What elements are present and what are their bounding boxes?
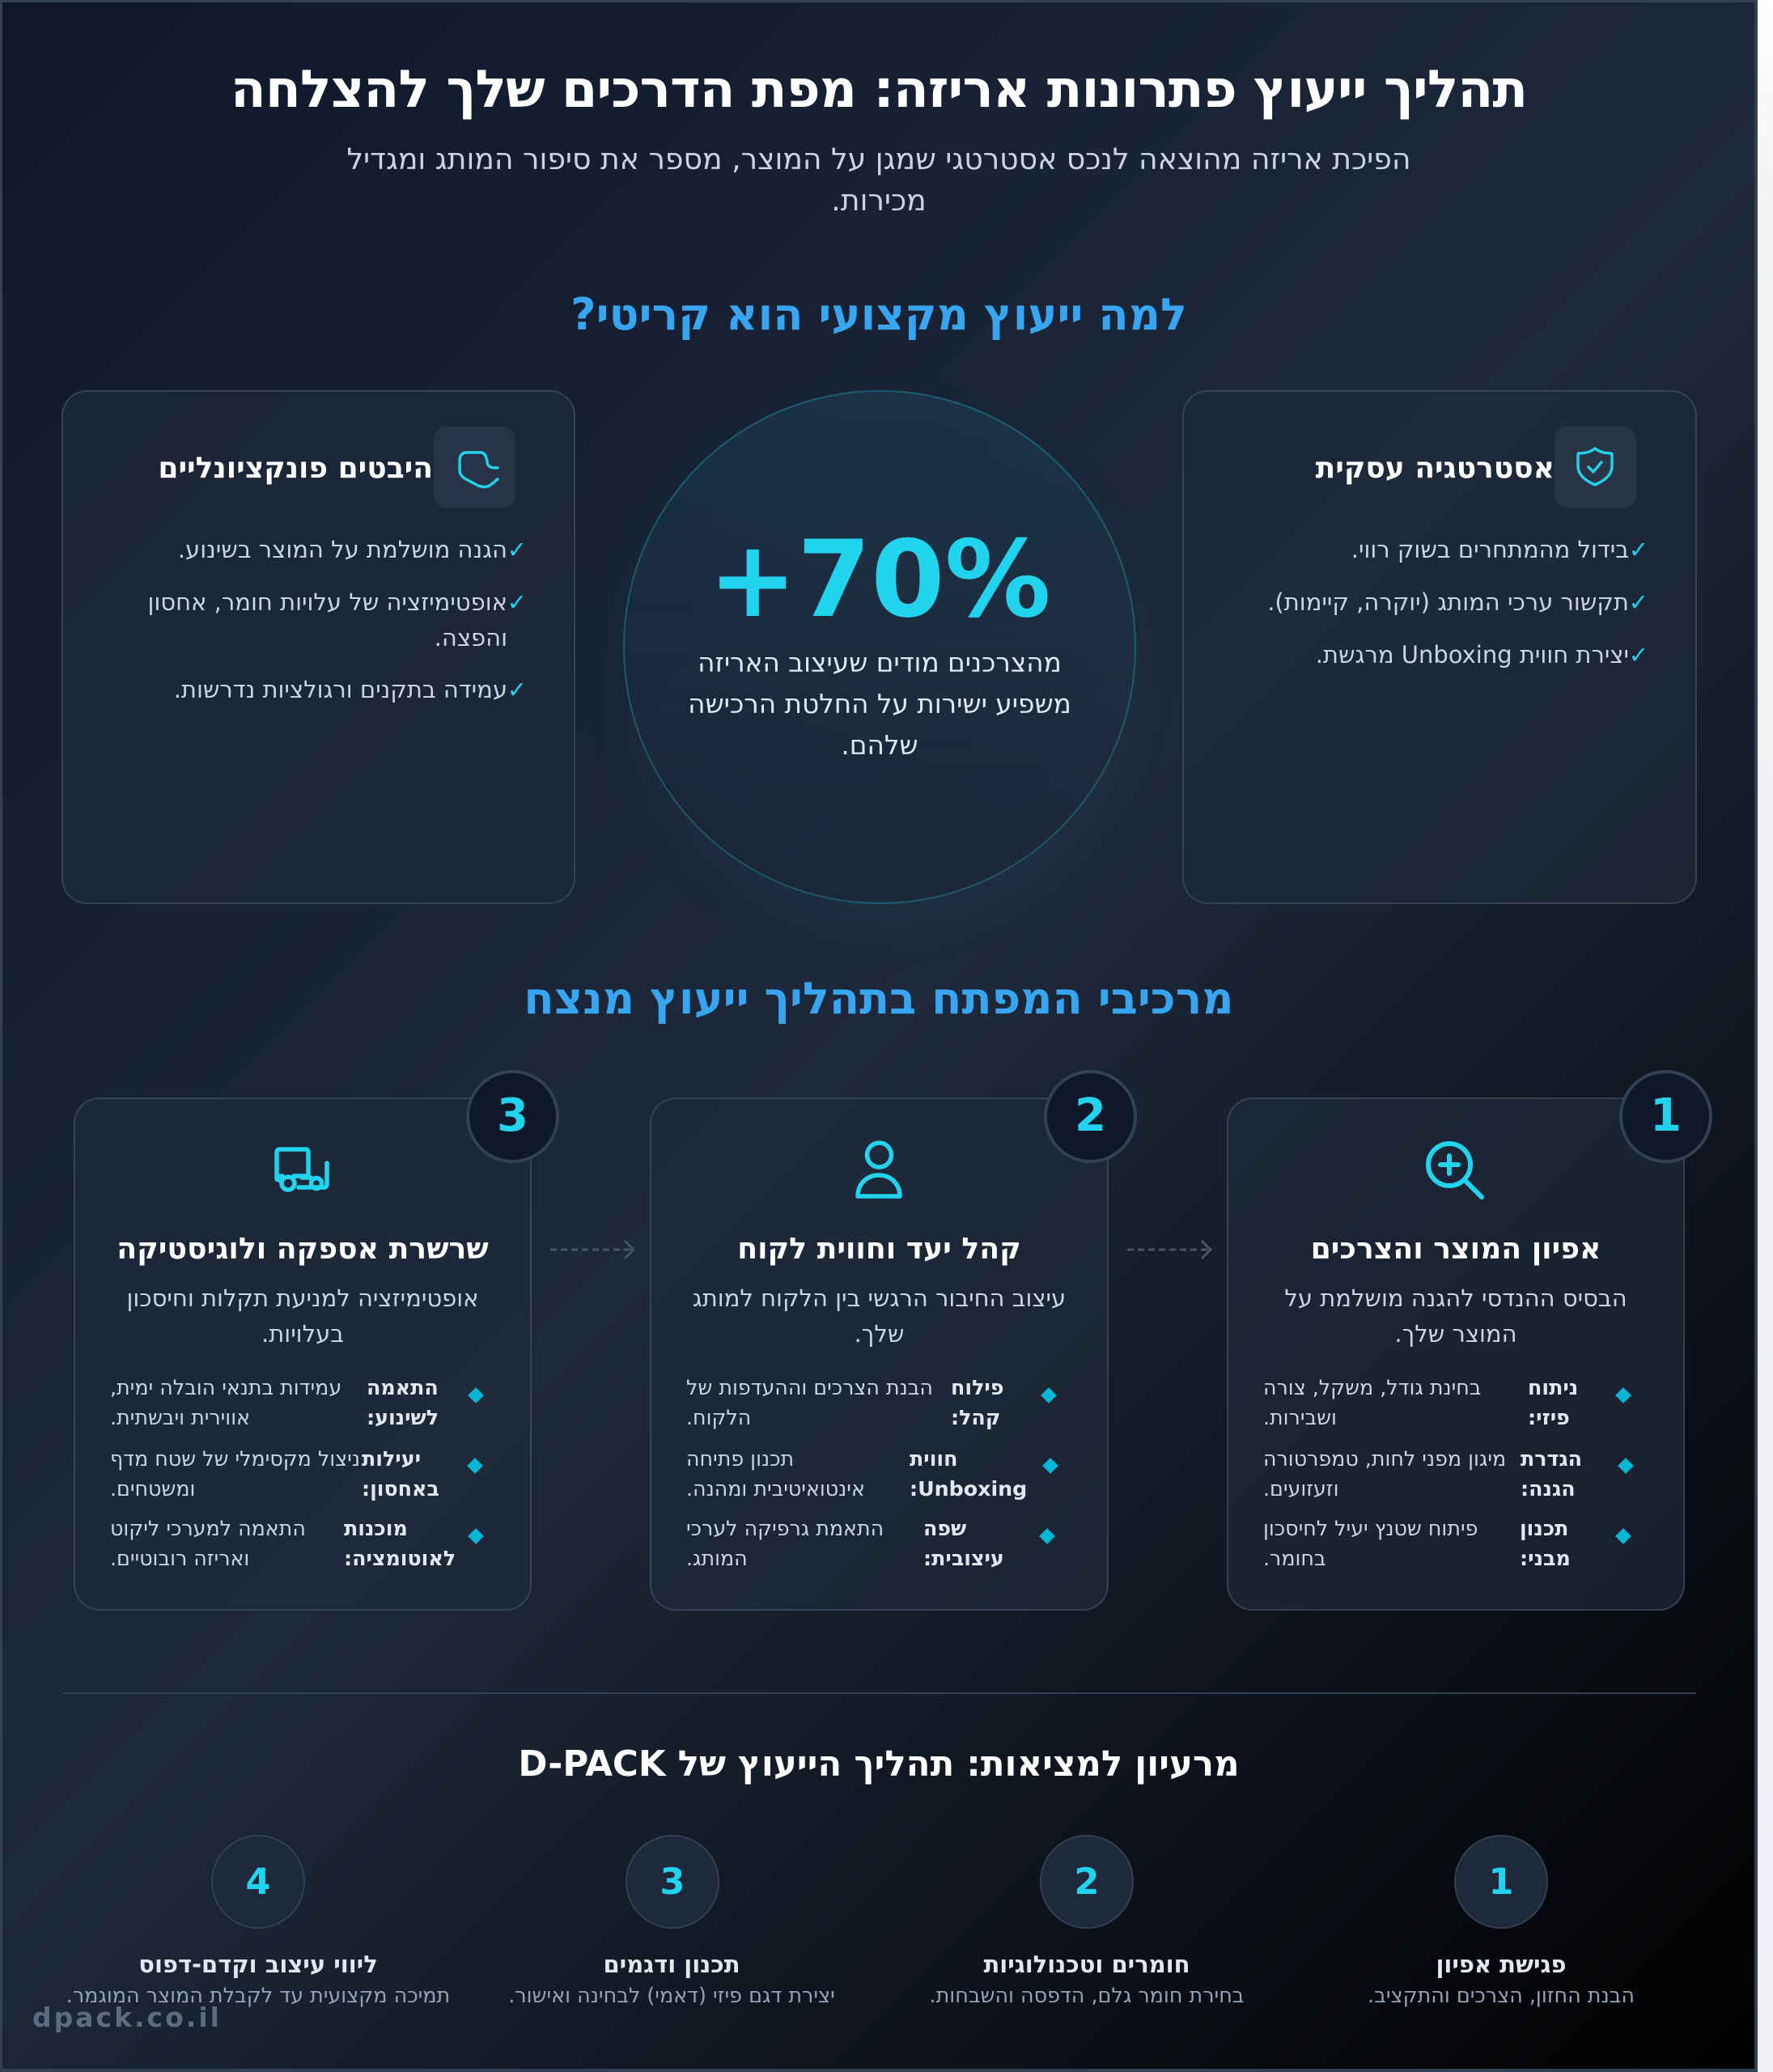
item: structural design: מבני: xyxy=(1520,1547,1571,1570)
component title: אפיון המוצר והצרכים xyxy=(1311,1231,1601,1266)
component title: אופטימיזציה למניעת תקלות וחיסכון xyxy=(126,1284,479,1312)
item: audience segmentation: קהל: xyxy=(951,1406,1000,1429)
item: protection definition: הגדרת xyxy=(1521,1447,1582,1471)
item: storage efficiency: ומשטחים. xyxy=(110,1477,195,1501)
item: design language: שפה xyxy=(923,1517,966,1540)
item: design language xyxy=(686,1517,1055,1570)
item: protection definition: מיגון מפני לחות, טמפרטורה xyxy=(1263,1447,1506,1471)
checklist: ✓ xyxy=(507,536,527,563)
big number: +70% xyxy=(708,517,1051,641)
item: shipping fit: התאמה xyxy=(367,1376,439,1399)
item: automation readiness: התאמה למערכי ליקוט xyxy=(110,1517,306,1540)
item: storage efficiency xyxy=(110,1447,483,1501)
checklist: ✓ xyxy=(507,676,527,703)
step text 2 xyxy=(828,1942,1346,2015)
badge 2: 2 xyxy=(1075,1089,1106,1142)
panel: functional aspects xyxy=(62,390,575,904)
subtitle: מכירות. xyxy=(831,183,927,218)
step circle 2: 2 xyxy=(1074,1860,1100,1903)
item: audience segmentation: פילוח xyxy=(951,1376,1003,1399)
item: protection definition: וזעזועים. xyxy=(1263,1477,1338,1501)
checklist: עמידה בתקנים ורגולציות נדרשות. xyxy=(174,676,507,703)
component title: המוצר שלך. xyxy=(1394,1320,1517,1348)
step circle 1: 1 xyxy=(1488,1860,1514,1903)
arrow: step 1 to step 2 xyxy=(1127,1240,1212,1259)
step text 4: תמיכה מקצועית עד לקבלת המוצר המוגמר. xyxy=(66,1983,450,2007)
step circle 4: 4 xyxy=(245,1860,271,1903)
step circle 3 xyxy=(626,1835,719,1929)
item: storage efficiency: ניצול מקסימלי של שטח מדף xyxy=(110,1447,360,1471)
item: storage efficiency: יעילות xyxy=(362,1447,421,1471)
step circle 2 xyxy=(1040,1835,1134,1929)
step text 1 xyxy=(1368,1951,1635,2007)
item: unboxing experience: תכנון פתיחה xyxy=(686,1447,794,1471)
component title: עיצוב החיבור הרגשי בין הלקוח למותג xyxy=(693,1284,1066,1312)
step text 4 xyxy=(0,1942,517,2015)
icon: truck xyxy=(274,1147,329,1192)
step text 3 xyxy=(413,1942,931,2015)
heading: key components: מרכיבי המפתח בתהליך ייעוץ מנצח xyxy=(524,973,1234,1024)
item: shipping fit: אווירית ויבשתית. xyxy=(110,1406,250,1429)
item: structural design xyxy=(1263,1517,1631,1570)
checklist: ✓ xyxy=(1629,588,1648,616)
item: storage efficiency: באחסון: xyxy=(362,1477,439,1501)
checklist: ✓ xyxy=(1629,536,1648,563)
icon: shield check xyxy=(1555,427,1636,508)
panel: 70% statistic circle xyxy=(623,390,1136,904)
component title xyxy=(1284,1231,1627,1348)
step text 4: ליווי עיצוב וקדם-דפוס xyxy=(138,1951,378,1978)
statistic caption xyxy=(688,648,1071,761)
item: design language: עיצובית: xyxy=(923,1547,1004,1570)
watermark: dpack.co.il xyxy=(32,2002,222,2033)
item: physical analysis xyxy=(1263,1376,1631,1429)
item: shipping fit xyxy=(110,1376,484,1429)
component title: הבסיס ההנדסי להגנה מושלמת על xyxy=(1284,1284,1627,1312)
item: audience segmentation xyxy=(686,1376,1057,1429)
item: physical analysis: ניתוח xyxy=(1528,1376,1578,1399)
panel: component 2 audience and experience xyxy=(650,1070,1137,1611)
item: shipping fit: עמידות בתנאי הובלה ימית, xyxy=(110,1376,341,1399)
item: automation readiness: מוכנות xyxy=(344,1517,408,1540)
checklist: ✓ xyxy=(507,588,527,616)
component title: בעלויות. xyxy=(261,1320,344,1348)
icon: magnifier plus xyxy=(1426,1141,1484,1199)
icon: person xyxy=(855,1140,902,1199)
arrow: step 2 to step 3 xyxy=(550,1240,634,1259)
step circle 4 xyxy=(211,1835,305,1929)
checklist xyxy=(147,536,527,703)
checklist: והפצה. xyxy=(435,623,507,651)
component title: שלך. xyxy=(855,1320,904,1348)
statistic caption: שלהם. xyxy=(841,730,918,761)
panel heading: אסטרטגיה עסקית xyxy=(1316,452,1555,485)
checklist: תקשור ערכי המותג (יוקרה, קיימות). xyxy=(1267,588,1629,616)
item: audience segmentation: הלקוח. xyxy=(686,1406,751,1429)
item: unboxing experience: אינטואיטיבית ומהנה. xyxy=(686,1477,865,1501)
badge 3: 3 xyxy=(497,1089,528,1142)
statistic caption: מהצרכנים מודים שעיצוב האריזה xyxy=(698,648,1062,678)
step circle 3: 3 xyxy=(660,1860,685,1903)
title: תהליך ייעוץ פתרונות אריזה: מפת הדרכים שלך להצלחה xyxy=(231,60,1527,120)
checklist: בידול מהמתחרים בשוק רווי. xyxy=(1351,536,1629,563)
panel: business strategy xyxy=(1182,390,1697,904)
item: unboxing experience: Unboxing: xyxy=(910,1477,1027,1501)
subtitle xyxy=(346,142,1411,218)
item: protection definition: הגנה: xyxy=(1521,1477,1576,1501)
item: physical analysis: בחינת גודל, משקל, צורה xyxy=(1263,1376,1481,1399)
item: design language: התאמת גרפיקה לערכי xyxy=(686,1517,884,1540)
component title: שרשרת אספקה ולוגיסטיקה xyxy=(117,1231,489,1266)
step text 3: תכנון ודגמים xyxy=(603,1951,740,1978)
panel: component 3 supply chain xyxy=(74,1070,559,1611)
item: physical analysis: ושבירות. xyxy=(1263,1406,1337,1429)
item: protection definition xyxy=(1263,1447,1634,1501)
badge 1 xyxy=(1619,1070,1712,1163)
checklist: אופטימיזציה של עלויות חומר, אחסון xyxy=(147,588,507,616)
item: design language: המותג. xyxy=(686,1547,748,1570)
badge 2 xyxy=(1044,1070,1137,1163)
checklist: הגנה מושלמת על המוצר בשינוע. xyxy=(178,536,507,563)
item: automation readiness: לאוטומציה: xyxy=(344,1547,456,1570)
component title xyxy=(117,1231,489,1348)
badge 3 xyxy=(466,1070,559,1163)
item: physical analysis: פיזי: xyxy=(1528,1406,1570,1429)
panel heading: היבטים פונקציונליים xyxy=(158,452,433,485)
subtitle: הפיכת אריזה מהוצאה לנכס אסטרטגי שמגן על המוצר, מספר את סיפור המותג ומגדיל xyxy=(346,142,1411,176)
checklist xyxy=(1267,536,1648,669)
item: automation readiness: ואריזה רובוטיים. xyxy=(110,1547,249,1570)
item: shipping fit: לשינוע: xyxy=(367,1406,439,1429)
item: automation readiness xyxy=(110,1517,484,1570)
item: structural design: תכנון xyxy=(1520,1517,1568,1540)
item: audience segmentation: הבנת הצרכים וההעדפות של xyxy=(686,1376,933,1399)
step circle 1 xyxy=(1454,1835,1548,1929)
item: structural design: פיתוח שטנץ יעיל לחיסכון xyxy=(1263,1517,1478,1540)
statistic caption: משפיע ישירות על החלטת הרכישה xyxy=(688,689,1071,720)
checklist: יצירת חווית Unboxing מרגשת. xyxy=(1316,641,1629,669)
panel: component 1 product specification xyxy=(1227,1070,1712,1611)
checklist: ✓ xyxy=(1629,641,1648,669)
component title: קהל יעד וחווית לקוח xyxy=(737,1231,1021,1266)
step text 1: פגישת אפיון xyxy=(1436,1951,1567,1978)
icon: clipped heart xyxy=(434,427,515,508)
step text 3: יצירת דגם פיזי (דאמי) לבחינה ואישור. xyxy=(508,1983,835,2007)
item: unboxing experience xyxy=(686,1447,1058,1501)
item: unboxing experience: חווית xyxy=(910,1447,957,1471)
item: structural design: בחומר. xyxy=(1263,1547,1326,1570)
badge 1: 1 xyxy=(1650,1089,1682,1142)
heading: why consulting is critical: למה ייעוץ מקצועי הוא קריטי? xyxy=(570,289,1187,340)
component title xyxy=(693,1231,1066,1348)
step text 2: בחירת חומר גלם, הדפסה והשבחות. xyxy=(930,1983,1244,2007)
step text 1: הבנת החזון, הצרכים והתקציב. xyxy=(1368,1983,1635,2007)
step text 2: חומרים וטכנולוגיות xyxy=(983,1951,1190,1978)
heading: from idea to reality: מרעיון למציאות: תהליך הייעוץ של D-PACK xyxy=(518,1744,1240,1785)
